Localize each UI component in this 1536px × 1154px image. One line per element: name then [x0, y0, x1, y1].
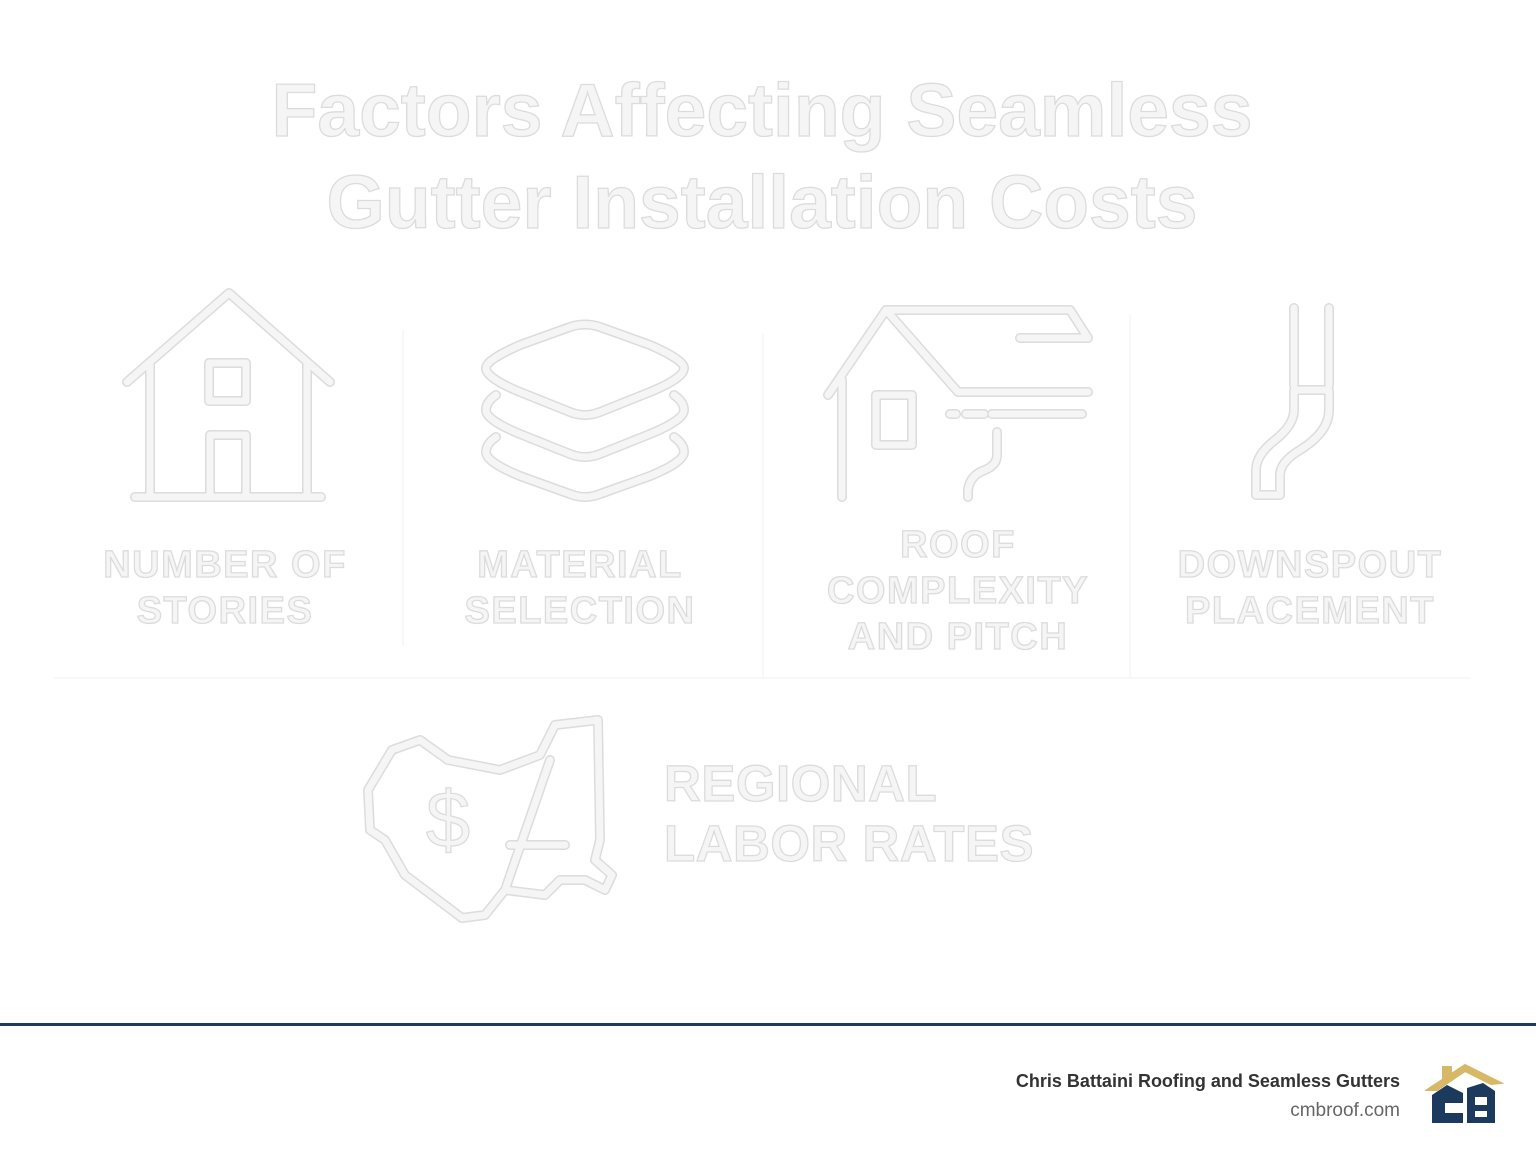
label: downspout placement: [1178, 544, 1442, 632]
footer rule: [0, 1023, 1536, 1026]
icon: house: [127, 293, 330, 497]
label: regional labor rates: REGIONAL: [664, 755, 937, 812]
label: regional labor rates: [664, 755, 1034, 872]
label: downspout placement: DOWNSPOUT: [1178, 544, 1442, 586]
footer text: Chris Battaini Roofing and Seamless Gutters: [1016, 1071, 1400, 1091]
label: number of stories: [103, 544, 347, 632]
label: roof complexity: COMPLEXITY: [827, 570, 1089, 612]
footer text: cmbroof.com: [1290, 1100, 1400, 1121]
label: roof complexity: ROOF: [900, 524, 1016, 566]
icon: layers: [486, 324, 684, 497]
label: material selection: [465, 544, 695, 632]
logo: [1425, 1064, 1504, 1123]
title: [272, 68, 1252, 244]
icon: roof house: [828, 310, 1088, 497]
title: Factors Affecting Seamless: [272, 68, 1252, 152]
icon: region map with dollar: [368, 720, 612, 918]
label: material selection: SELECTION: [465, 590, 695, 632]
label: number of stories: STORIES: [137, 590, 313, 632]
dollar sign: $: [426, 775, 470, 864]
title: Gutter Installation Costs: [327, 160, 1197, 244]
label: roof complexity: AND PITCH: [848, 616, 1068, 658]
label: roof complexity: [827, 524, 1089, 658]
label: regional labor rates: LABOR RATES: [664, 815, 1034, 872]
footer text: [1016, 1071, 1400, 1121]
label: material selection: MATERIAL: [477, 544, 683, 586]
icon: downspout: [1256, 308, 1329, 495]
label: number of stories: NUMBER OF: [103, 544, 347, 586]
label: downspout placement: PLACEMENT: [1185, 590, 1435, 632]
